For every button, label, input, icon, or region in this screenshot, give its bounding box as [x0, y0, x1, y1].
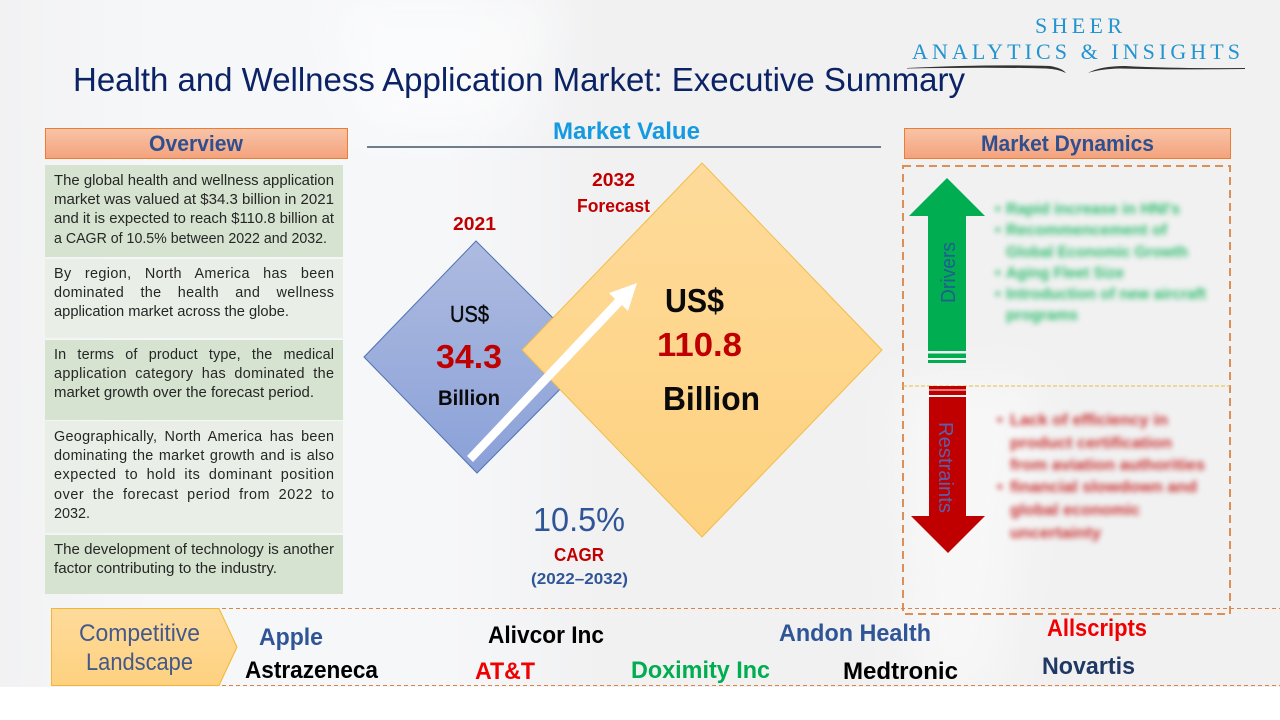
text block: technology: The development of technology is another: [54, 542, 334, 558]
text block: restraints list: uncertainty: [1010, 525, 1101, 542]
text block: technology: factor contributing to the industry.: [54, 561, 277, 577]
value: 110.8 billion: US$: [665, 282, 724, 319]
text block: region: [45, 259, 343, 338]
callout: CAGR: [531, 501, 628, 588]
text block: region: By region, North America has been: [54, 266, 334, 282]
text block: drivers list: Aging Fleet Size: [1006, 265, 1124, 282]
text block: geography: [45, 421, 343, 533]
company names: Novartis: [1042, 653, 1135, 680]
logo: Sheer Analytics & Insights: [907, 13, 1245, 73]
arrow: restraints: [911, 386, 985, 553]
text block: market value summary: [45, 165, 343, 257]
title: Health and Wellness Application Market: Executive Summary: [73, 61, 965, 98]
label: 2032 forecast: Forecast: [577, 196, 650, 216]
text block: market value summary: and it is expected to reach $110.8 billion at: [54, 211, 334, 227]
text block: geography: Geographically, North America has been: [54, 429, 334, 445]
company names: AT&T: [475, 658, 535, 685]
text block: drivers list: [995, 201, 1207, 324]
text block: geography: expected to hold its dominant position: [54, 467, 334, 483]
text block: drivers list: Rapid increase in HNI's: [1006, 201, 1180, 218]
text block: geography: 2032.: [54, 506, 90, 522]
logo: Sheer Analytics & Insights: ANALYTICS & INSIGHTS: [912, 39, 1240, 64]
text block: restraints list: •: [997, 479, 1003, 496]
arrow: growth: [467, 283, 637, 462]
text block: product type: [45, 340, 343, 420]
panel: market dynamics: [903, 128, 1230, 614]
heading: competitive landscape: Competitive: [79, 620, 200, 647]
arrow: restraints: Restraints: [934, 422, 956, 513]
text block: market value summary: market was valued at $34.3 billion in 2021: [54, 192, 334, 208]
text block: restraints list: •: [997, 412, 1003, 429]
value: 34.3 billion: 34.3: [436, 338, 502, 375]
company names: Allscripts: [1047, 615, 1147, 642]
company names: [245, 615, 1147, 685]
diamond: 2032 forecast value: [522, 163, 882, 537]
text block: restraints list: global economic: [1010, 502, 1140, 519]
text block: restraints list: financial slowdown and: [1010, 479, 1197, 496]
panel: competitive landscape: [52, 608, 1280, 686]
text block: restraints list: [997, 412, 1205, 542]
value: 34.3 billion: [436, 301, 502, 410]
value: 34.3 billion: US$: [450, 301, 489, 327]
text block: technology: [45, 535, 343, 594]
company names: Apple: [259, 624, 323, 651]
heading: overview: [46, 128, 348, 158]
diamond: 2021 value: [364, 241, 592, 473]
text block: product type: application category has dominated the: [54, 366, 334, 382]
heading: market dynamics: Market Dynamics: [981, 131, 1154, 156]
heading: market dynamics: [904, 128, 1230, 158]
company names: Alivcor Inc: [488, 622, 604, 649]
text block: region: dominated the health and wellness: [54, 285, 334, 301]
text block: geography: over the forecast period from 2022 to: [54, 487, 334, 503]
value: 110.8 billion: [657, 282, 760, 417]
text block: market value summary: The global health and wellness application: [54, 173, 334, 189]
text block: drivers list: •: [995, 201, 1001, 218]
company names: Andon Health: [779, 620, 931, 647]
callout: CAGR: 10.5%: [533, 501, 625, 538]
text block: geography: dominating the market growth and is also: [54, 448, 334, 464]
text block: product type: In terms of product type, the medical: [54, 347, 334, 363]
heading: market value: Market Value: [553, 118, 700, 145]
company names: Doximity Inc: [631, 657, 770, 684]
chart: market value diamonds: [364, 163, 882, 537]
label: 2032 forecast: 2032: [592, 170, 635, 190]
logo: Sheer Analytics & Insights: SHEER: [1035, 13, 1122, 38]
text block: restraints list: Lack of efficiency in: [1010, 412, 1168, 429]
arrow: drivers: [909, 178, 985, 363]
heading: competitive landscape: Landscape: [86, 649, 193, 676]
panel: overview: [45, 128, 348, 594]
text block: drivers list: •: [995, 286, 1001, 303]
label: 2032 forecast: [577, 170, 650, 216]
value: 110.8 billion: 110.8: [657, 326, 742, 363]
text block: drivers list: Introduction of new aircraft: [1006, 286, 1207, 303]
heading: overview: Overview: [149, 131, 244, 156]
company names: Medtronic: [843, 658, 958, 685]
text block: restraints list: from aviation authorities: [1010, 457, 1205, 474]
callout: CAGR: CAGR: [554, 545, 604, 565]
text block: product type: market growth over the forecast period.: [54, 385, 314, 401]
text block: drivers list: programs: [1006, 307, 1078, 324]
arrow: drivers: Drivers: [938, 242, 960, 303]
text block: market value summary: a CAGR of 10.5% between 2022 and 2032.: [54, 231, 327, 247]
text block: drivers list: •: [995, 265, 1001, 282]
callout: CAGR: (2022–2032): [531, 571, 628, 588]
value: 34.3 billion: Billion: [438, 387, 500, 410]
text block: region: application market across the globe.: [54, 304, 289, 320]
label: 2021: 2021: [453, 214, 496, 234]
text block: restraints list: product certification: [1010, 435, 1172, 452]
text block: drivers list: •: [995, 222, 1001, 239]
value: 110.8 billion: Billion: [663, 380, 760, 417]
heading: competitive landscape: [52, 608, 237, 686]
text block: drivers list: Recommencement of: [1006, 222, 1168, 239]
company names: Astrazeneca: [245, 657, 379, 684]
text block: drivers list: Global Economic Growth: [1006, 244, 1188, 261]
